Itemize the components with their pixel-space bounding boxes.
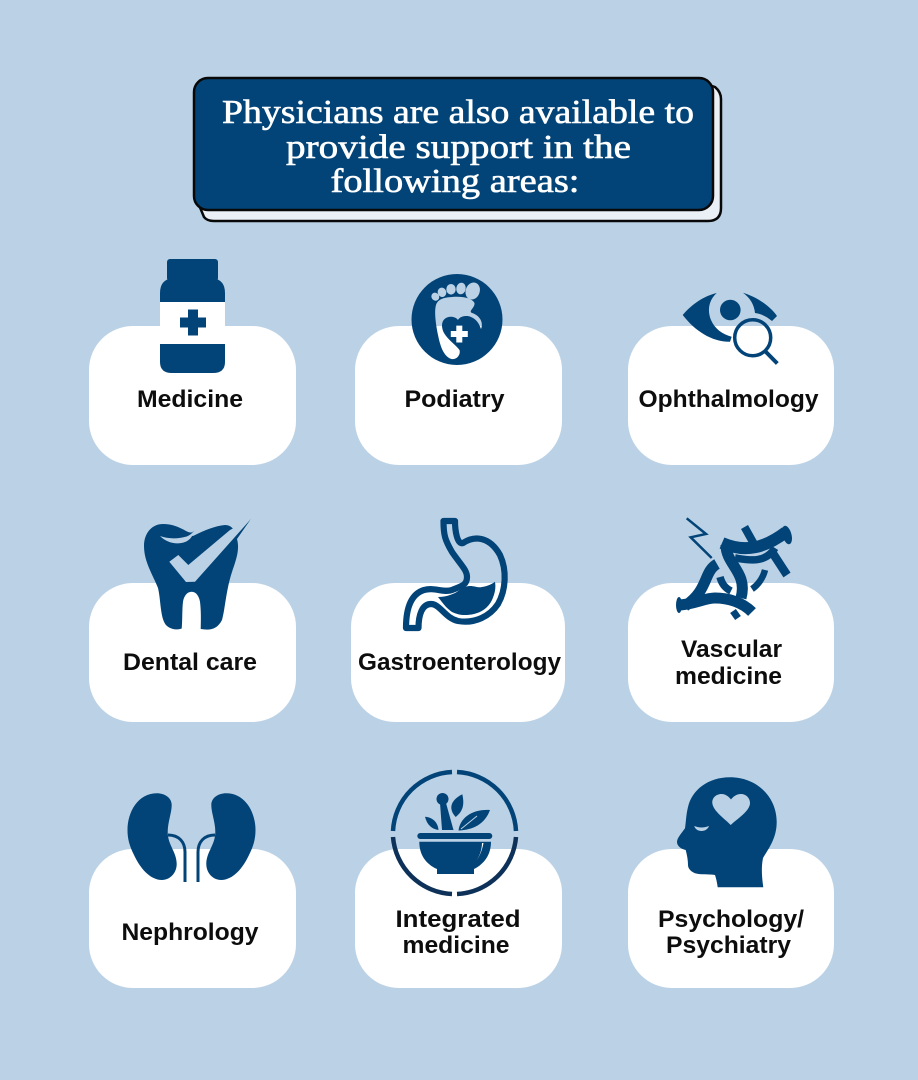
panel: vascular medicine: Vascular — [681, 636, 782, 663]
panel: psychology and psychiatry — [628, 777, 834, 988]
title banner — [194, 78, 721, 221]
icon: tooth with check — [144, 519, 251, 630]
icon: head with heart — [677, 777, 777, 887]
icon: mortar and herbs — [393, 772, 516, 894]
icon: foot in circle — [412, 274, 502, 365]
title banner: provide support in the — [286, 129, 631, 166]
panel: ophthalmology: Ophthalmology — [638, 386, 819, 413]
panel: medicine: Medicine — [137, 386, 243, 413]
panel: vascular medicine — [628, 518, 834, 722]
icon: blood vessels with lightning — [676, 518, 794, 618]
panel: podiatry: Podiatry — [404, 386, 505, 413]
panel: nephrology: Nephrology — [122, 919, 259, 946]
title banner: following areas: — [330, 163, 580, 200]
icon: kidneys — [128, 793, 256, 882]
panel: nephrology — [89, 793, 296, 988]
panel: dental care — [89, 519, 296, 722]
panel: vascular medicine: medicine — [675, 663, 782, 690]
icon: medicine bottle — [160, 259, 225, 373]
panel: integrated medicine — [355, 772, 562, 988]
panel: integrated medicine: medicine — [402, 932, 510, 959]
title banner: Physicians are also available to — [222, 94, 694, 131]
panel: medicine — [89, 259, 296, 465]
icon: eye with magnifier — [683, 293, 777, 364]
panel: podiatry — [355, 274, 562, 465]
panel: gastroenterology — [351, 521, 565, 722]
panel: integrated medicine: Integrated — [396, 906, 520, 933]
panel: psychology and psychiatry: Psychology/ — [658, 906, 804, 933]
panel: dental care: Dental care — [123, 649, 257, 676]
icon: stomach — [406, 521, 505, 628]
panel: gastroenterology: Gastroenterology — [358, 649, 562, 676]
panel: psychology and psychiatry: Psychiatry — [666, 932, 792, 959]
panel: ophthalmology — [628, 293, 834, 465]
